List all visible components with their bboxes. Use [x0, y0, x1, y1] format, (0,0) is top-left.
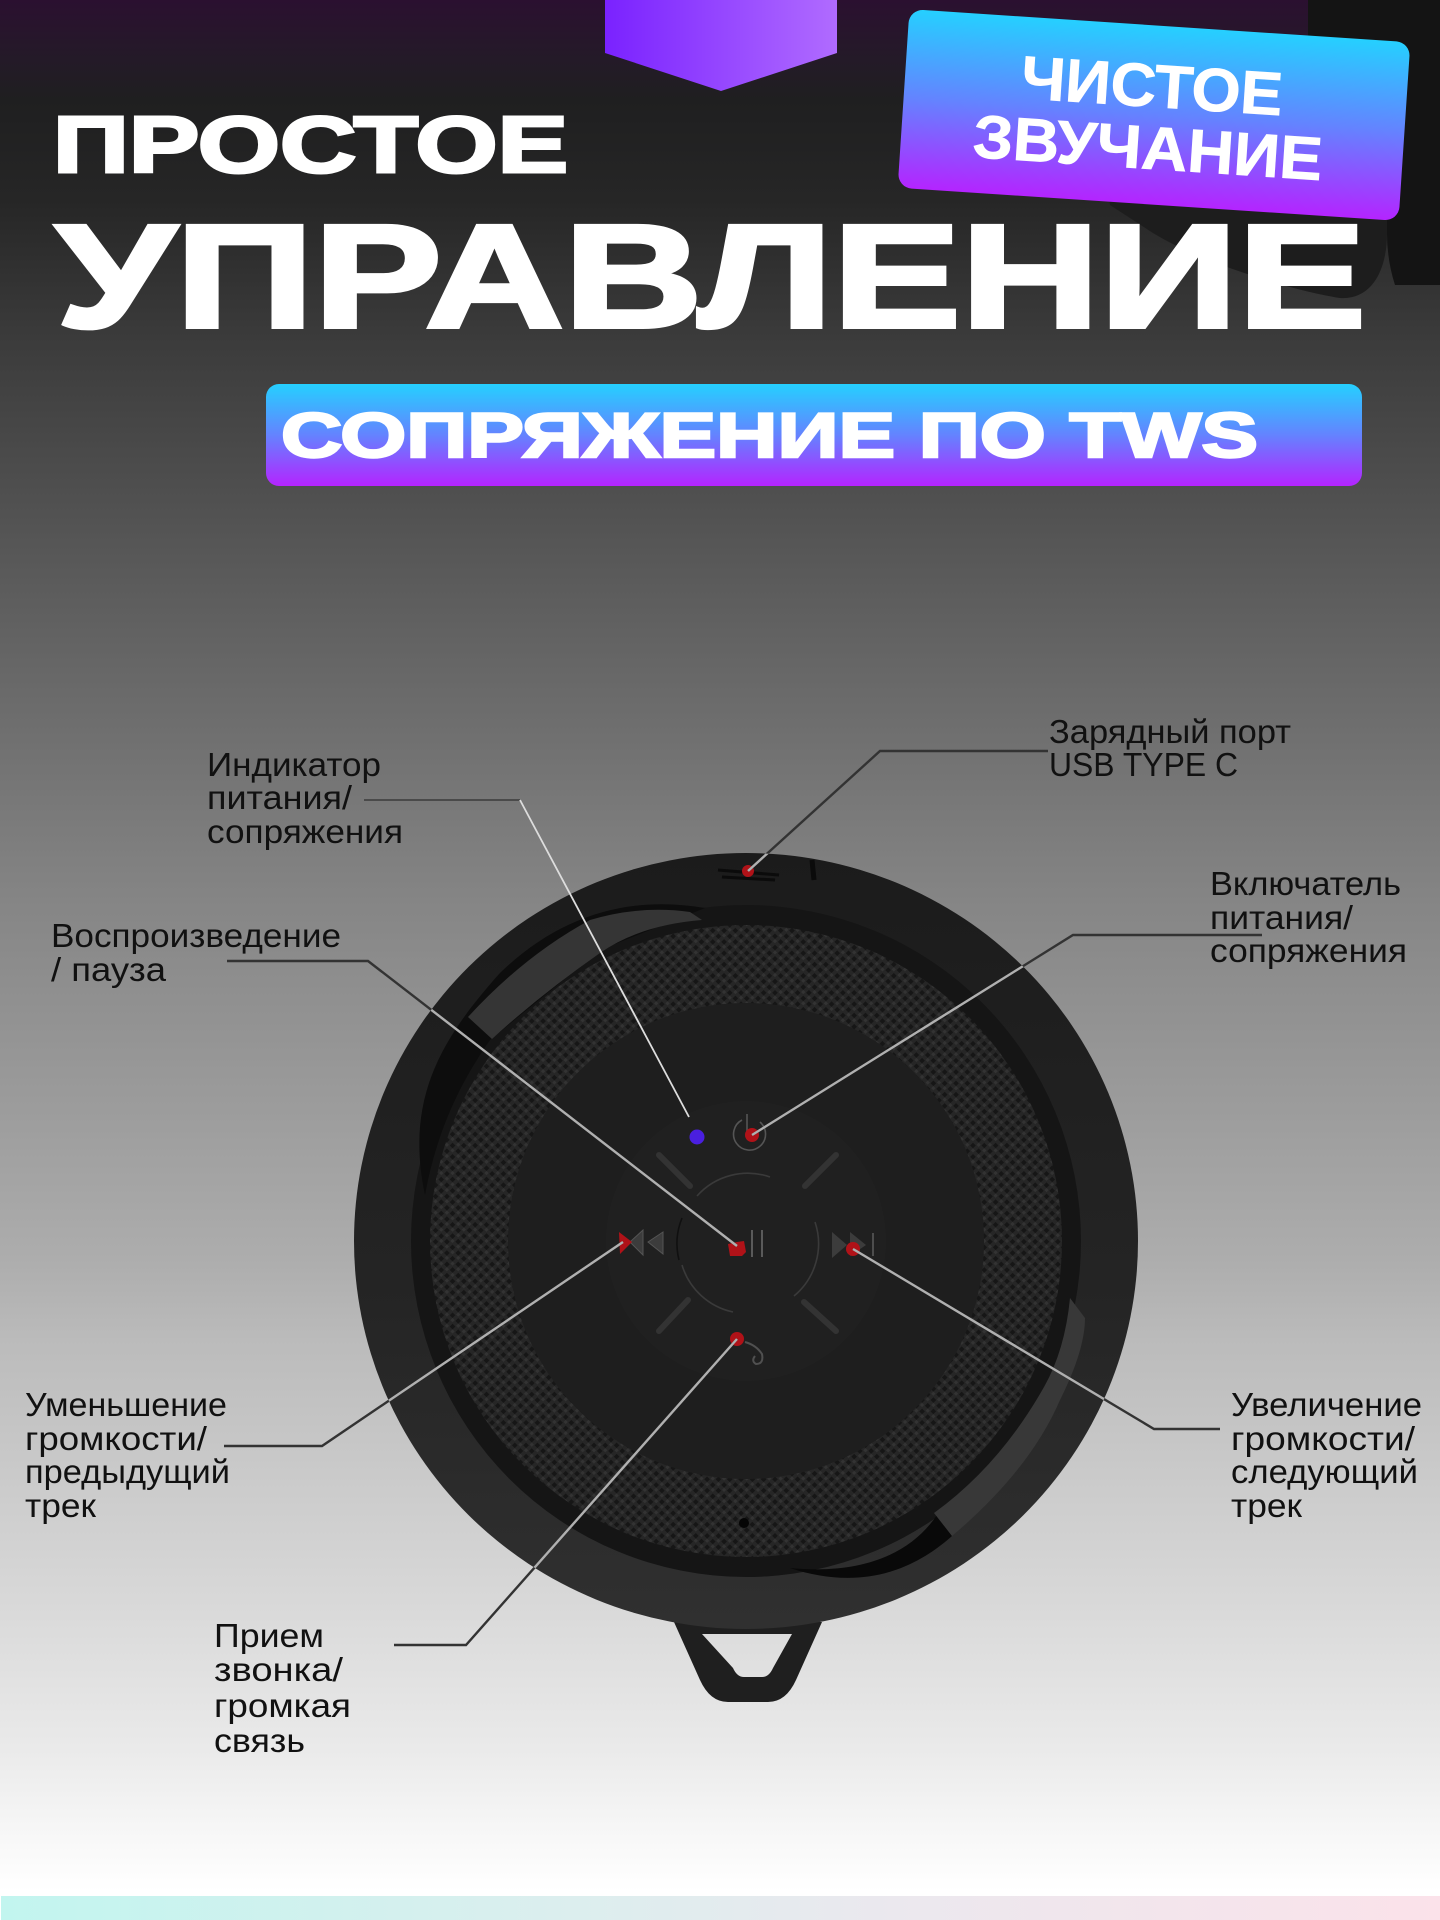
- icon: call: [745, 1342, 762, 1364]
- callout: play pause: [51, 917, 737, 1246]
- callout: power indicator: [207, 746, 689, 1117]
- label: питания/: [207, 779, 353, 816]
- badge text line 1: ЧИСТОЕ: [1019, 43, 1285, 128]
- indicator led: [690, 1130, 704, 1144]
- diagonal slashes: [659, 1155, 836, 1331]
- center button arcs: [677, 1173, 819, 1312]
- light band upper left: [468, 910, 702, 1039]
- label: предыдущий: [25, 1453, 230, 1490]
- label: USB TYPE C: [1049, 746, 1238, 783]
- speaker grille fabric: [430, 925, 1062, 1557]
- icon: power: [734, 1114, 766, 1150]
- label: звонка/: [214, 1651, 344, 1688]
- tilted badge: clean sound: [898, 9, 1410, 221]
- speaker handle: [674, 1622, 822, 1702]
- title line 1: ПРОСТОЕ: [53, 100, 568, 189]
- charging port slot: [718, 870, 779, 880]
- label: громкости/: [1231, 1420, 1416, 1457]
- label: Зарядный порт: [1049, 713, 1291, 750]
- label: сопряжения: [207, 813, 403, 850]
- light band lower right: [934, 1298, 1085, 1536]
- label: питания/: [1210, 899, 1354, 936]
- decorative dark shape top right: [1100, 0, 1440, 298]
- callout: charging port: [748, 713, 1291, 871]
- inner dark ring: [411, 905, 1081, 1577]
- label: Увеличение: [1231, 1386, 1422, 1423]
- gradient bar: TWS pairing: [266, 384, 1362, 486]
- dark arc lower right: [790, 1515, 952, 1578]
- label: Прием: [214, 1617, 324, 1654]
- label: Индикатор: [207, 746, 381, 783]
- icon: next track: [832, 1232, 866, 1258]
- label: следующий: [1231, 1453, 1418, 1490]
- callout: volume up: [853, 1249, 1422, 1524]
- purple ribbon badge: [605, 0, 837, 91]
- callout: volume down: [25, 1242, 623, 1524]
- speaker illustration: [354, 853, 1138, 1702]
- center control disc: [508, 1003, 984, 1479]
- speaker body: [354, 853, 1138, 1629]
- dark crescent: [419, 904, 705, 1195]
- callout: power switch: [752, 865, 1407, 1135]
- title line 2: УПРАВЛЕНИЕ: [56, 195, 1366, 359]
- label: связь: [214, 1722, 305, 1759]
- bottom gradient strip: [1, 1896, 1440, 1920]
- red markers: [619, 865, 860, 1346]
- microphone hole: [739, 1518, 749, 1528]
- label: Уменьшение: [25, 1386, 227, 1423]
- icon: play pause: [752, 1230, 762, 1257]
- icon: previous track: [630, 1230, 663, 1255]
- label: громкая: [214, 1687, 351, 1724]
- label: сопряжения: [1210, 932, 1407, 969]
- label: Воспроизведение: [51, 917, 341, 954]
- label: трек: [25, 1487, 97, 1524]
- label: / пауза: [51, 951, 167, 988]
- label: громкости/: [25, 1420, 208, 1457]
- bar text: СОПРЯЖЕНИЕ ПО TWS: [281, 401, 1258, 471]
- callout: answer call: [214, 1339, 737, 1759]
- badge text line 2: ЗВУЧАНИЕ: [971, 102, 1325, 193]
- label: Включатель: [1210, 865, 1401, 902]
- label: трек: [1231, 1487, 1303, 1524]
